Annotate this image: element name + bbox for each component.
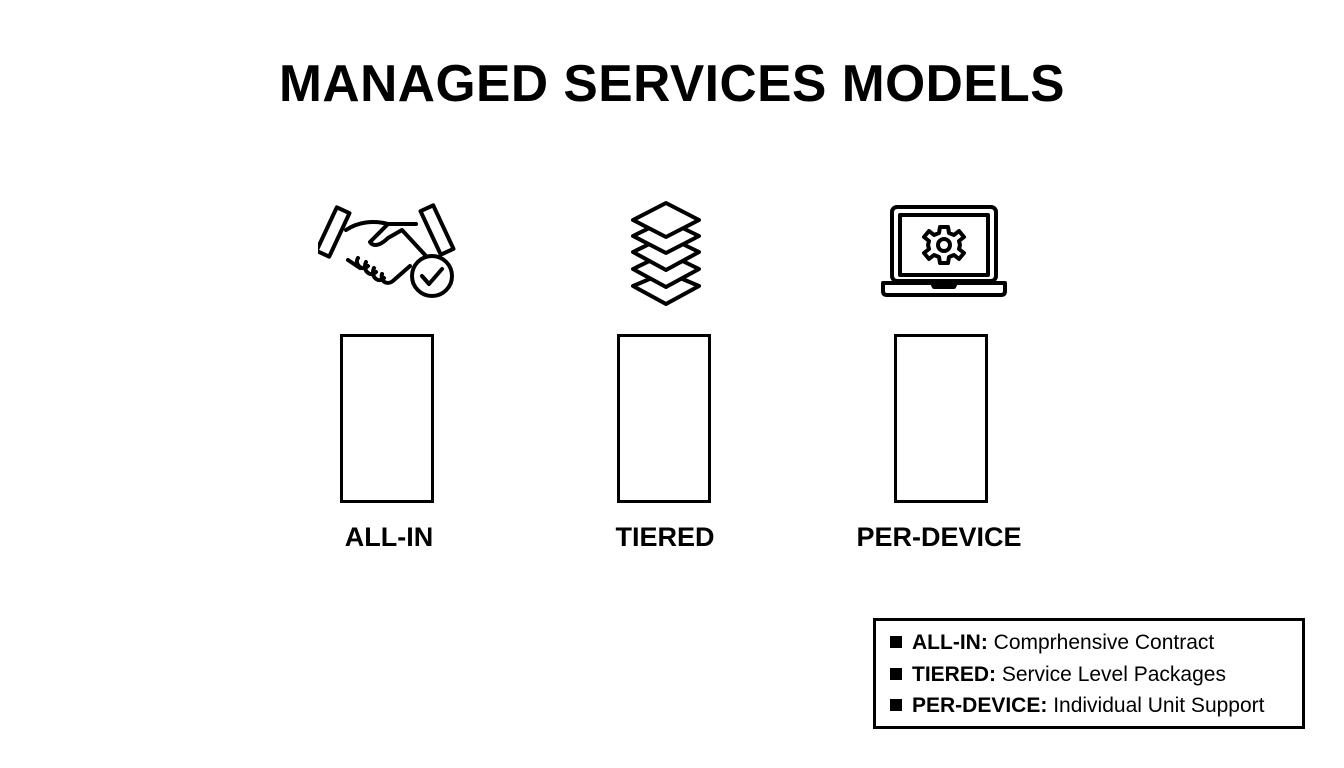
legend item: per-device: PER-DEVICE: Individual Unit Support bbox=[912, 694, 1264, 717]
icon: layers bbox=[630, 201, 702, 306]
label: tiered: TIERED bbox=[615, 522, 714, 552]
legend item: all-in: ALL-IN: Comprhensive Contract bbox=[912, 631, 1214, 654]
legend item: tiered: TIERED: Service Level Packages bbox=[912, 663, 1226, 686]
title: MANAGED SERVICES MODELS bbox=[279, 54, 1065, 112]
bar: all-in bbox=[340, 334, 434, 503]
legend bbox=[873, 618, 1305, 729]
bar: tiered bbox=[617, 334, 711, 503]
icon: laptop with gear bbox=[881, 205, 1007, 297]
bar: per-device bbox=[894, 334, 988, 503]
label: per-device: PER-DEVICE bbox=[856, 522, 1022, 552]
icon: handshake bbox=[318, 203, 456, 298]
label: all-in: ALL-IN bbox=[345, 522, 433, 552]
